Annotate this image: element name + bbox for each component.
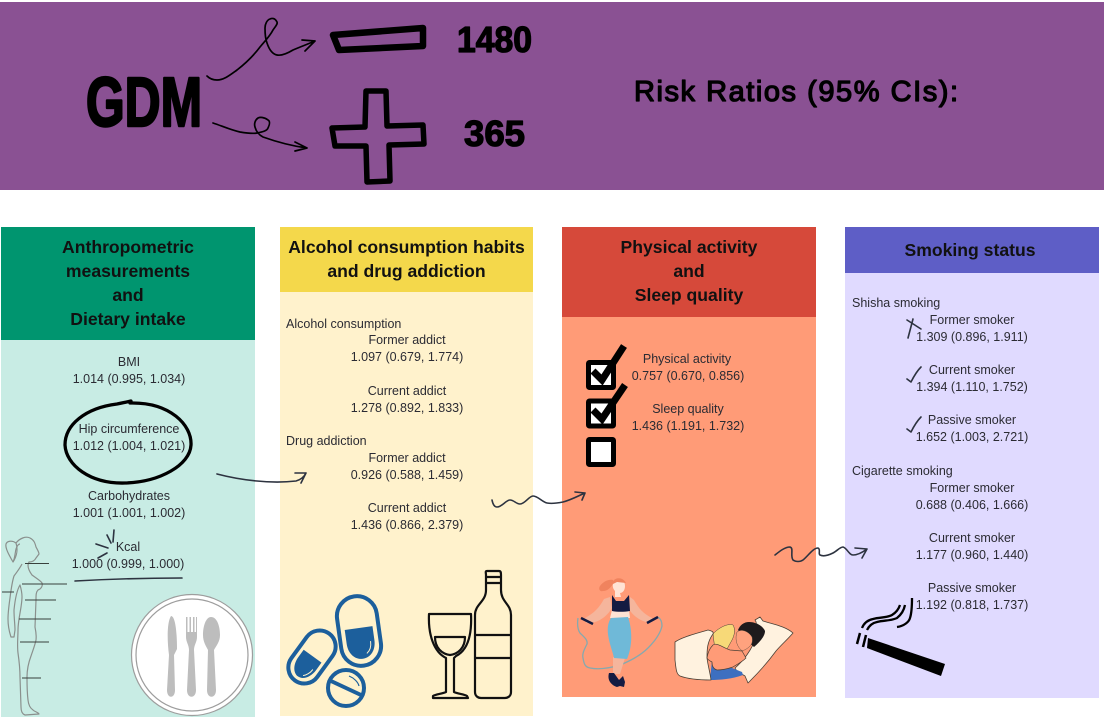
drug addiction results: Former addict bbox=[368, 451, 446, 465]
carbohydrates result: Carbohydrates bbox=[88, 489, 170, 503]
panel heading: and bbox=[112, 285, 144, 305]
shisha smoking results: Passive smoker bbox=[928, 413, 1016, 427]
kcal underline bbox=[75, 578, 182, 581]
positive sign bbox=[332, 91, 424, 182]
shisha smoking results: 1.394 (1.110, 1.752) bbox=[916, 380, 1028, 394]
panel heading: and drug addiction bbox=[327, 261, 486, 281]
physical activity result: 0.757 (0.670, 0.856) bbox=[632, 369, 744, 383]
panel heading: Dietary intake bbox=[70, 309, 186, 329]
carbohydrates result: 1.001 (1.001, 1.002) bbox=[73, 506, 185, 520]
arrow to positive group bbox=[213, 117, 307, 151]
drug addiction results: 0.926 (0.588, 1.459) bbox=[351, 468, 463, 482]
cigarette smoking results: 1.177 (0.960, 1.440) bbox=[916, 548, 1028, 562]
kcal result: 1.000 (0.999, 1.000) bbox=[72, 557, 184, 571]
drug addiction results: Current addict bbox=[368, 501, 447, 515]
alcohol consumption results: Alcohol consumption bbox=[286, 317, 401, 331]
cigarette smoking results: 1.192 (0.818, 1.737) bbox=[916, 598, 1028, 612]
cigarette smoking results: 0.688 (0.406, 1.666) bbox=[916, 498, 1028, 512]
shisha smoking results: Former smoker bbox=[930, 313, 1014, 327]
panel heading: Sleep quality bbox=[635, 285, 743, 305]
drug addiction results: Drug addiction bbox=[286, 434, 367, 448]
icon: wine glass and bottle bbox=[429, 571, 511, 698]
risk ratios heading: Risk Ratios (95% CIs): bbox=[634, 76, 958, 108]
icon: pills bbox=[282, 594, 384, 706]
alcohol consumption results: 1.097 (0.679, 1.774) bbox=[351, 350, 463, 364]
header banner bbox=[0, 2, 1104, 190]
shisha smoking results: Shisha smoking bbox=[852, 296, 940, 310]
negative sign bbox=[333, 28, 423, 50]
emphasis marks bbox=[96, 530, 114, 558]
sleep quality result: 1.436 (1.191, 1.732) bbox=[632, 419, 744, 433]
cigarette smoking results: Former smoker bbox=[930, 481, 1014, 495]
arrow: alcohol to physical activity bbox=[492, 492, 585, 507]
cigarette smoking results: Current smoker bbox=[929, 531, 1015, 545]
panel heading: Anthropometric bbox=[62, 237, 194, 257]
panel: anthropometric measurements and dietary intake bbox=[1, 227, 255, 717]
cigarette smoking results: Passive smoker bbox=[928, 581, 1016, 595]
icon: cigarette with smoke bbox=[857, 598, 945, 676]
panel heading: Smoking status bbox=[904, 240, 1036, 260]
drug addiction results: 1.436 (0.866, 2.379) bbox=[351, 518, 463, 532]
panel: physical activity and sleep quality bbox=[562, 227, 816, 697]
cigarette smoking results: Cigarette smoking bbox=[852, 464, 953, 478]
panel heading: and bbox=[673, 261, 705, 281]
BMI result: BMI bbox=[118, 355, 140, 369]
shisha smoking results: Current smoker bbox=[929, 363, 1015, 377]
sleep quality result: Sleep quality bbox=[652, 402, 725, 416]
physical activity result: Physical activity bbox=[643, 352, 732, 366]
alcohol consumption results: 1.278 (0.892, 1.833) bbox=[351, 401, 463, 415]
icon: body outline bbox=[2, 537, 67, 715]
arrow: anthropometric to alcohol bbox=[217, 473, 306, 483]
alcohol consumption results: Current addict bbox=[368, 384, 447, 398]
hip circumference result: Hip circumference bbox=[79, 422, 179, 436]
alcohol consumption results: Former addict bbox=[368, 333, 446, 347]
negative count: 1480 bbox=[457, 19, 532, 60]
check mark bbox=[907, 367, 921, 382]
shisha smoking results: 1.309 (0.896, 1.911) bbox=[916, 330, 1028, 344]
hand-drawn circle bbox=[65, 401, 191, 483]
icon: checklist bbox=[588, 346, 625, 464]
icon: person skipping rope bbox=[578, 578, 662, 687]
panel heading: Alcohol consumption habits bbox=[288, 237, 525, 257]
panel heading: Physical activity bbox=[621, 237, 758, 257]
BMI result: 1.014 (0.995, 1.034) bbox=[73, 372, 185, 386]
kcal result: Kcal bbox=[116, 540, 140, 554]
GDM label: GDM bbox=[86, 63, 202, 141]
positive count: 365 bbox=[464, 113, 525, 154]
cross mark bbox=[907, 319, 921, 338]
check mark bbox=[907, 417, 921, 432]
shisha smoking results: 1.652 (1.003, 2.721) bbox=[916, 430, 1028, 444]
hip circumference result: 1.012 (1.004, 1.021) bbox=[73, 439, 185, 453]
icon: sleeping person bbox=[675, 617, 793, 683]
icon: plate with cutlery bbox=[132, 594, 252, 716]
arrow to negative group bbox=[207, 18, 315, 80]
panel heading: measurements bbox=[66, 261, 190, 281]
panel: alcohol consumption and drug addiction bbox=[280, 227, 533, 716]
panel: smoking status bbox=[845, 227, 1099, 698]
arrow: physical activity to smoking bbox=[775, 547, 867, 562]
